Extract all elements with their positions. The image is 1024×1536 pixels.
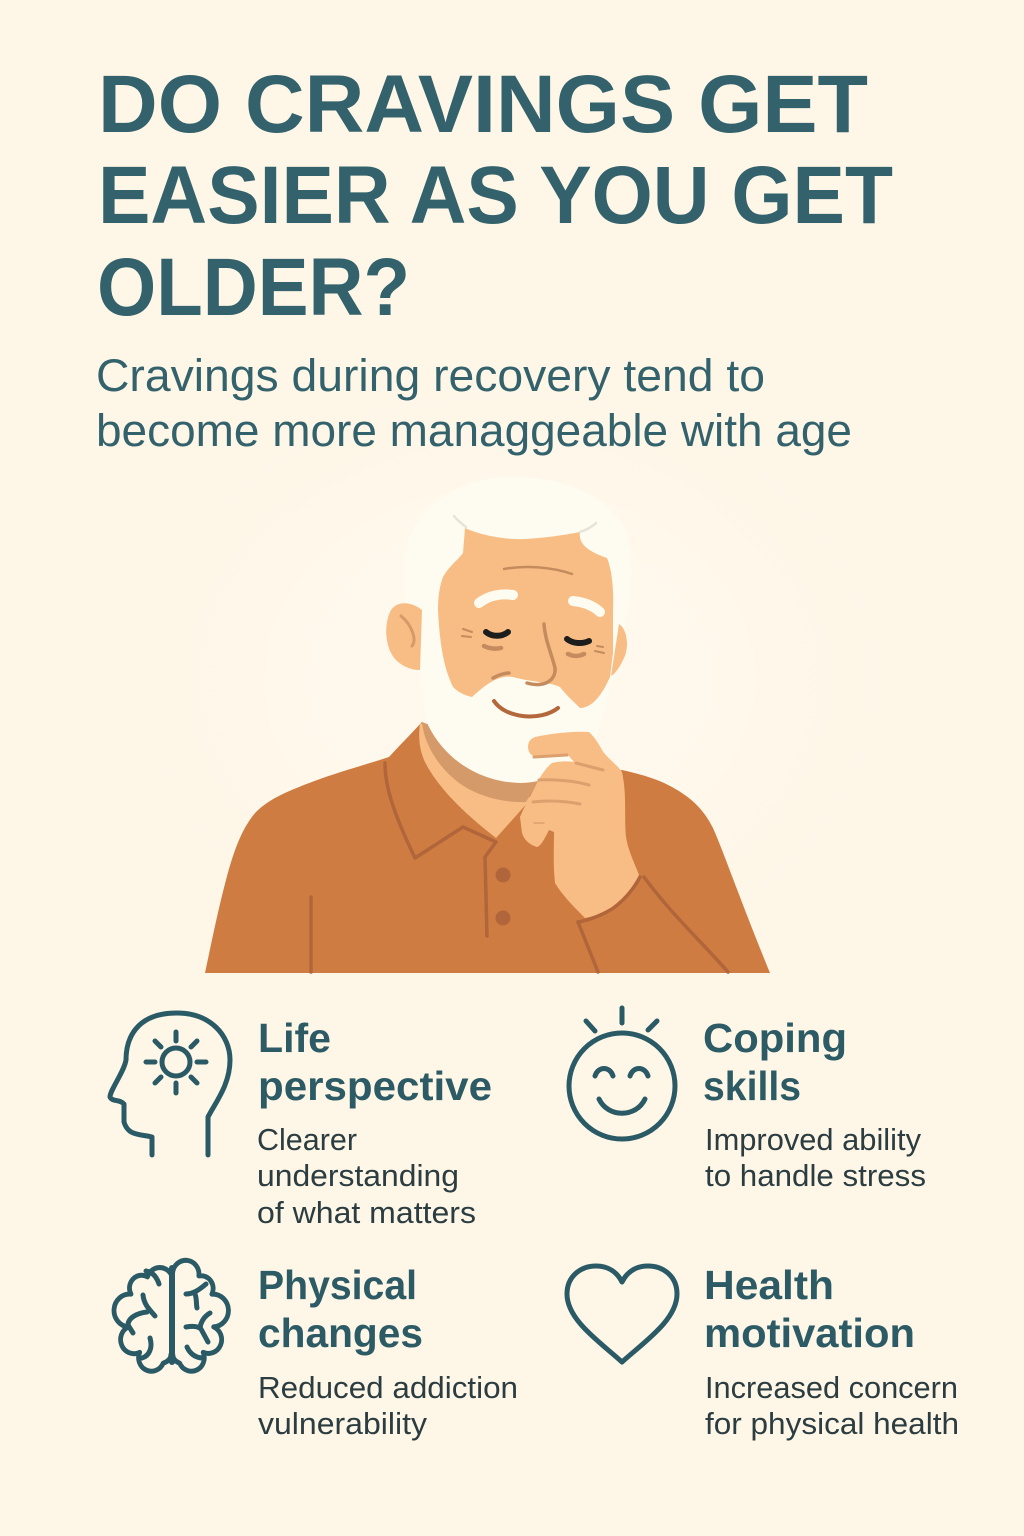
- subtitle: become more managgeable with age: [96, 405, 852, 456]
- title: DO CRAVINGS GET: [98, 59, 868, 150]
- item: life perspective: [110, 1013, 492, 1230]
- description: for physical health: [705, 1406, 959, 1441]
- description: Clearer: [257, 1122, 357, 1157]
- hand: [520, 732, 639, 918]
- item: physical changes: [114, 1260, 518, 1441]
- heading: [258, 1262, 423, 1356]
- item: coping skills: [569, 1008, 926, 1193]
- icon: head with sun: [110, 1013, 230, 1155]
- heading: [704, 1262, 915, 1356]
- description: Improved ability: [705, 1122, 921, 1157]
- heading: motivation: [704, 1310, 915, 1356]
- neck shadow: [422, 722, 545, 802]
- description: understanding: [257, 1158, 459, 1193]
- eyes: [486, 632, 589, 643]
- cuff: [578, 877, 640, 922]
- face lines: [462, 567, 604, 685]
- title: OLDER?: [97, 242, 410, 333]
- neck: [419, 723, 530, 838]
- description: [258, 1370, 518, 1441]
- icon: heart: [567, 1266, 677, 1362]
- description: vulnerability: [258, 1406, 428, 1441]
- shirt lines: [311, 763, 728, 972]
- heading: Coping: [703, 1015, 847, 1061]
- description: Reduced addiction: [258, 1370, 518, 1405]
- description: of what matters: [257, 1195, 476, 1230]
- item: health motivation: [567, 1262, 959, 1441]
- heading: Health: [704, 1262, 834, 1308]
- eyebrows: [479, 594, 600, 612]
- description: to handle stress: [705, 1158, 926, 1193]
- description: [705, 1370, 959, 1441]
- description: [705, 1122, 926, 1193]
- heading: [703, 1015, 847, 1109]
- hair and beard: [404, 477, 632, 783]
- heading: changes: [258, 1310, 423, 1356]
- title: EASIER AS YOU GET: [98, 150, 893, 241]
- illustration: older man thinking: [205, 477, 770, 973]
- heading: perspective: [258, 1063, 492, 1109]
- heading: Life: [258, 1015, 331, 1061]
- hair fringe shading: [454, 516, 596, 532]
- icon: smiling face: [569, 1008, 675, 1139]
- heading: Physical: [258, 1262, 417, 1308]
- description: [257, 1122, 476, 1230]
- shirt: [205, 722, 770, 973]
- finger lines: [533, 755, 603, 823]
- description: Increased concern: [705, 1370, 958, 1405]
- subtitle: Cravings during recovery tend to: [96, 350, 765, 401]
- right ear: [611, 624, 627, 676]
- face: [438, 528, 613, 708]
- icon: brain: [114, 1260, 228, 1371]
- heading: skills: [703, 1063, 801, 1109]
- mouth: [494, 701, 558, 716]
- subtitle: [96, 350, 852, 456]
- left ear: [386, 603, 422, 670]
- buttons: [496, 868, 510, 926]
- heading: [258, 1015, 492, 1109]
- title: [97, 59, 893, 333]
